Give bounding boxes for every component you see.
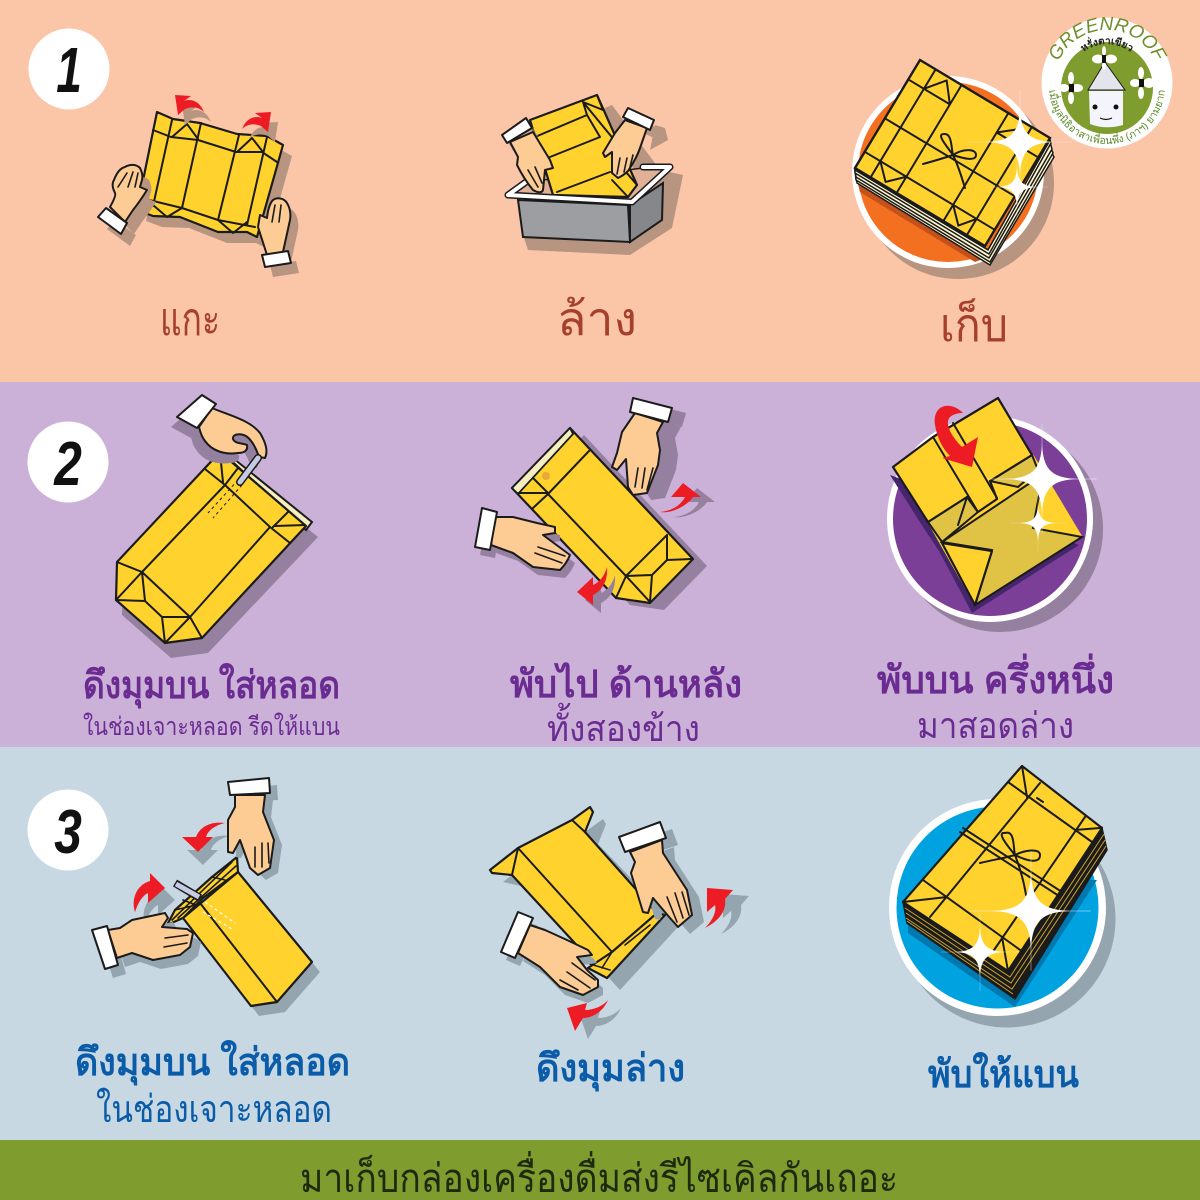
hand: top <box>228 778 282 880</box>
hand: left on carton <box>502 118 553 192</box>
illustration: pull top corner into straw hole <box>116 395 318 658</box>
sparkle: small <box>986 156 1048 218</box>
hand: right on carton <box>603 108 662 178</box>
arrow: folding over <box>935 406 978 467</box>
badge: step number 2 <box>28 422 108 502</box>
sparkle: large <box>987 424 1097 534</box>
caption: step 3 left: ในช่องเจาะหลอด <box>96 1088 332 1131</box>
sparkle: large <box>968 90 1072 194</box>
hand: top <box>612 398 686 500</box>
illustration: unfolding the carton <box>98 95 299 277</box>
hand: left <box>92 913 201 978</box>
logo text: brand name: GREENROOF <box>1050 16 1168 59</box>
sparkle: small <box>1009 494 1067 552</box>
arrow: right <box>705 888 749 934</box>
arrow: right flap lifted <box>242 112 278 142</box>
heading: step 2 middle: พับไป ด้านหลัง <box>510 662 742 706</box>
label: open: แกะ <box>160 293 220 345</box>
sparkle: large <box>971 851 1091 971</box>
label: wash: ล้าง <box>557 293 637 345</box>
panel: step 3 background <box>0 747 1200 1140</box>
arrow: upper <box>660 483 715 517</box>
hand: pulling corner <box>171 395 266 482</box>
badge: step number 1: 1 <box>56 35 82 106</box>
badge: step number 3: 3 <box>54 797 82 866</box>
label: store: เก็บ <box>940 298 1008 351</box>
badge: step number 3 <box>28 790 108 870</box>
arrow: left flap lifted <box>175 95 211 125</box>
heading: step 3 right: พับให้แบน <box>928 1052 1079 1096</box>
arrow: bottom <box>567 1000 621 1039</box>
logo: smiling character <box>1059 46 1155 127</box>
panel: step 2 background <box>0 382 1200 747</box>
straw <box>175 883 200 898</box>
illustration: stored stack on orange disc <box>852 60 1072 279</box>
arrow: lower <box>134 873 175 924</box>
logo text: project name: หรั่งตาเขียว <box>1080 37 1133 52</box>
footer slogan: มาเก็บกล่องเครื่องดื่มส่งรีไซเคิลกันเถอะ <box>300 1151 898 1200</box>
arrow: upper <box>182 823 230 865</box>
illustration: flattened stack on blue disc <box>889 766 1116 1028</box>
illustration: fold half on purple disc <box>887 398 1103 632</box>
logo: Greenroof seal <box>1042 16 1172 148</box>
illustration: fold to the back <box>475 398 715 613</box>
illustration: washing carton in basin <box>502 95 683 255</box>
heading: step 2 left: ดึงมุมบน ใส่หลอด <box>83 663 340 709</box>
caption: step 2 right: มาสอดล่าง <box>917 705 1074 746</box>
badge: step number 1 <box>28 28 110 110</box>
sparkle: small <box>941 913 1019 991</box>
hand: upper <box>619 822 704 934</box>
heading: step 2 right: พับบน ครึ่งหนึ่ง <box>877 653 1114 702</box>
heading: step 3 middle: ดึงมุมล่าง <box>536 1048 685 1092</box>
hand: lower left <box>98 165 156 246</box>
badge: step number 2: 2 <box>53 429 82 498</box>
straw <box>240 458 258 482</box>
hand: lower right <box>258 198 299 277</box>
caption: step 2 left: ในช่องเจาะหลอด รีดให้แบน <box>83 712 340 741</box>
panel: step 1 background <box>0 0 1200 382</box>
arrow: lower <box>577 567 615 613</box>
heading: step 3 left: ดึงมุมบน ใส่หลอด <box>75 1040 350 1086</box>
panel: footer band <box>0 1140 1200 1200</box>
illustration: pull bottom corner <box>490 807 749 1039</box>
hand: left <box>475 508 575 578</box>
hand: lower <box>501 912 603 1003</box>
logo text: tagline: เมื่อมูลนิธิอาสาเพื่อนพึ่ง (ภาฯ) ยามยาก <box>1049 90 1165 144</box>
caption: step 2 middle: ทั้งสองข้าง <box>547 702 700 749</box>
illustration: pull top corner with straw <box>92 778 320 1016</box>
